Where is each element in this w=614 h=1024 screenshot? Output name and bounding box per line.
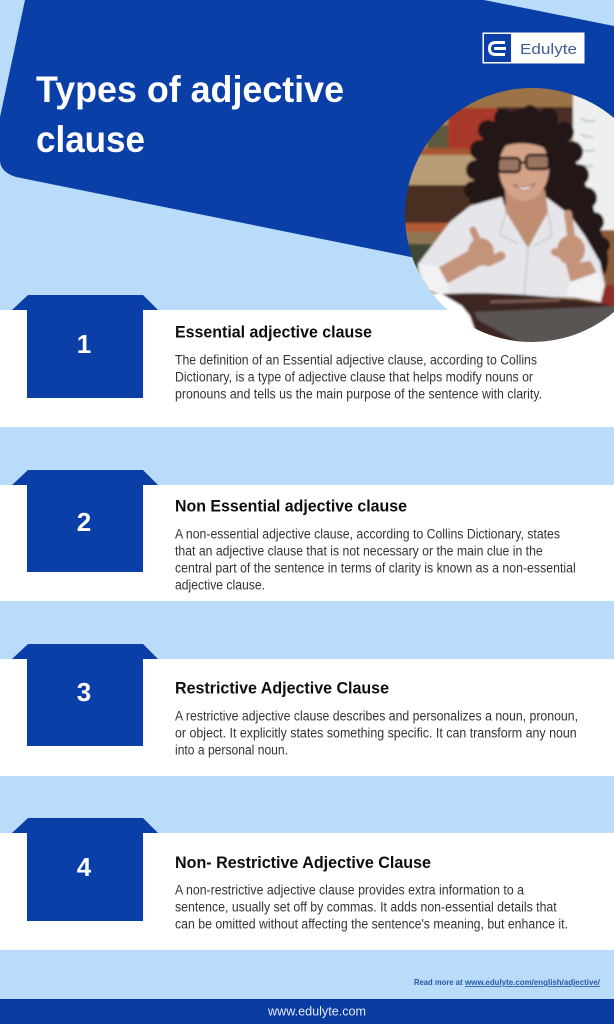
body text 1 — [175, 352, 542, 402]
header shape — [0, 0, 614, 300]
shirt — [418, 197, 605, 297]
number tab 1: 1 — [77, 329, 91, 359]
title — [36, 68, 344, 160]
body text 2: that an adjective clause that is not necessary or the main clue in the — [175, 544, 543, 558]
logo: Edulyte: Edulyte — [520, 41, 577, 58]
panel: Restrictive Adjective Clause — [0, 644, 614, 776]
body text 4: A non-restrictive adjective clause provides extra information to a — [175, 883, 525, 898]
photo: teacher gesturing at desk — [400, 85, 614, 345]
body text 4: can be omitted without affecting the sentence's meaning, but enhance it. — [175, 917, 568, 932]
body text 2 — [175, 526, 576, 592]
body text 4: sentence, usually set off by commas. It adds non-essential details that — [175, 900, 557, 915]
body text 3: or object. It explicitly states something specific. It can transform any noun — [175, 726, 577, 741]
title: clause — [36, 118, 145, 160]
panel: Essential adjective clause — [0, 295, 614, 427]
footer bar — [0, 999, 614, 1024]
logo: Edulyte — [482, 32, 584, 64]
desk — [442, 293, 614, 345]
number tab 3: 3 — [77, 677, 91, 707]
heading 3: Restrictive Adjective Clause — [175, 679, 389, 698]
number tab 2: 2 — [77, 507, 91, 537]
neck — [505, 190, 548, 246]
body text 3 — [175, 709, 578, 758]
body text 3: into a personal noun. — [175, 742, 288, 758]
panel: Non- Restrictive Adjective Clause — [0, 818, 614, 950]
number tab 4: 4 — [77, 852, 92, 882]
number tab 4 — [12, 818, 158, 921]
smile — [513, 183, 535, 190]
hair — [464, 105, 610, 275]
body text 1: pronouns and tells us the main purpose of the sentence with clarity. — [175, 386, 542, 402]
glasses — [498, 155, 549, 172]
cuffs — [419, 265, 448, 295]
body text 2: A non-essential adjective clause, according to Collins Dictionary, states — [175, 526, 560, 542]
body text 3: A restrictive adjective clause describes and personalizes a noun, pronoun, — [175, 709, 578, 724]
read more note: www.edulyte.com/english/adjective/ — [464, 977, 601, 987]
title: Types of adjective — [36, 68, 344, 110]
heading 2: Non Essential adjective clause — [175, 496, 407, 516]
laptop — [474, 306, 614, 345]
number tab 3 — [12, 644, 158, 746]
body text 2: central part of the sentence in terms of clarity is known as a non-essential — [175, 560, 576, 576]
read more note — [414, 977, 601, 987]
body text 4 — [175, 883, 568, 932]
number tab 2 — [12, 470, 158, 572]
number tab 1 — [12, 295, 158, 398]
body text 1: The definition of an Essential adjective clause, according to Collins — [175, 352, 537, 368]
footer bar: www.edulyte.com — [267, 1004, 366, 1018]
body text 2: adjective clause. — [175, 578, 265, 592]
face — [499, 135, 549, 201]
read more note: Read more at — [414, 977, 463, 987]
body text 1: Dictionary, is a type of adjective clause that helps modify nouns or — [175, 370, 533, 384]
panel: Non Essential adjective clause — [0, 470, 614, 601]
heading 4: Non- Restrictive Adjective Clause — [175, 853, 431, 872]
forearms and hands — [440, 214, 597, 283]
heading 1: Essential adjective clause — [175, 322, 372, 342]
